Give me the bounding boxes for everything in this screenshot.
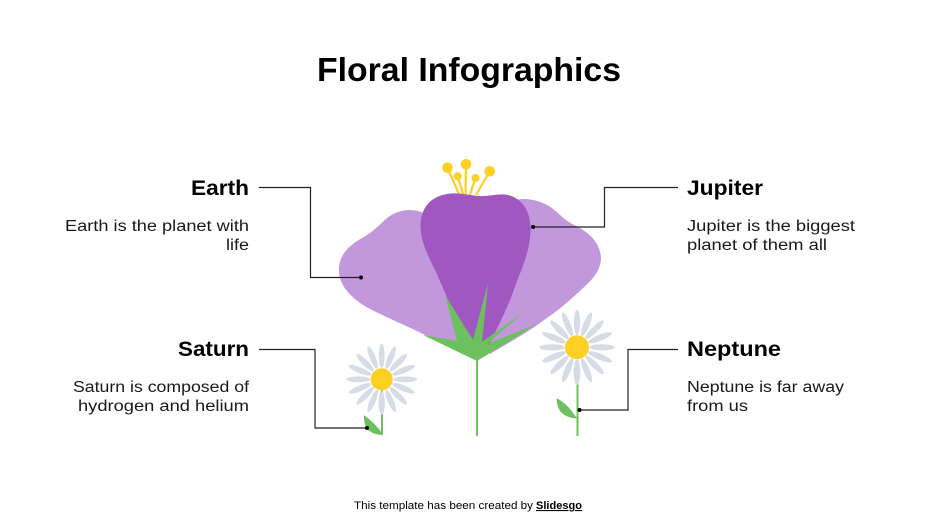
text block: Saturn: Saturn	[178, 338, 249, 361]
text block: Saturn	[73, 338, 250, 415]
connector: Jupiter	[531, 188, 678, 229]
text block: Saturn: hydrogen and helium	[78, 398, 249, 415]
text block: Earth	[65, 177, 249, 254]
text block: Jupiter: planet of them all	[687, 237, 827, 254]
text block: Earth: Earth is the planet with	[65, 218, 249, 235]
left petal	[339, 210, 470, 352]
connector: Neptune	[578, 350, 678, 412]
text block: Saturn: Saturn is composed of	[73, 379, 250, 396]
icon: stamens	[442, 159, 495, 195]
text block: Earth: Earth	[191, 177, 249, 200]
text block: Neptune	[687, 338, 844, 415]
text block: Neptune: Neptune is far away	[687, 379, 844, 396]
connector: Earth	[259, 188, 363, 280]
icon: left daisy	[346, 344, 417, 435]
footer credit: This template has been created by	[354, 500, 534, 512]
text block: Jupiter	[687, 177, 856, 254]
main stem	[476, 360, 478, 436]
text block: Earth: life	[226, 237, 249, 254]
text block: Jupiter: Jupiter	[687, 177, 763, 200]
text block: Neptune: from us	[687, 398, 748, 415]
connector: Saturn	[259, 350, 369, 430]
text block: Jupiter: Jupiter is the biggest	[687, 218, 856, 235]
footer credit: Slidesgo	[536, 500, 582, 512]
right petal	[470, 199, 601, 354]
illustration: main purple flower	[339, 159, 601, 436]
green sepals	[423, 283, 537, 361]
text block: Neptune: Neptune	[687, 338, 781, 361]
title: Floral Infographics	[317, 51, 621, 88]
icon: right daisy	[539, 310, 615, 436]
center petal	[420, 193, 531, 350]
